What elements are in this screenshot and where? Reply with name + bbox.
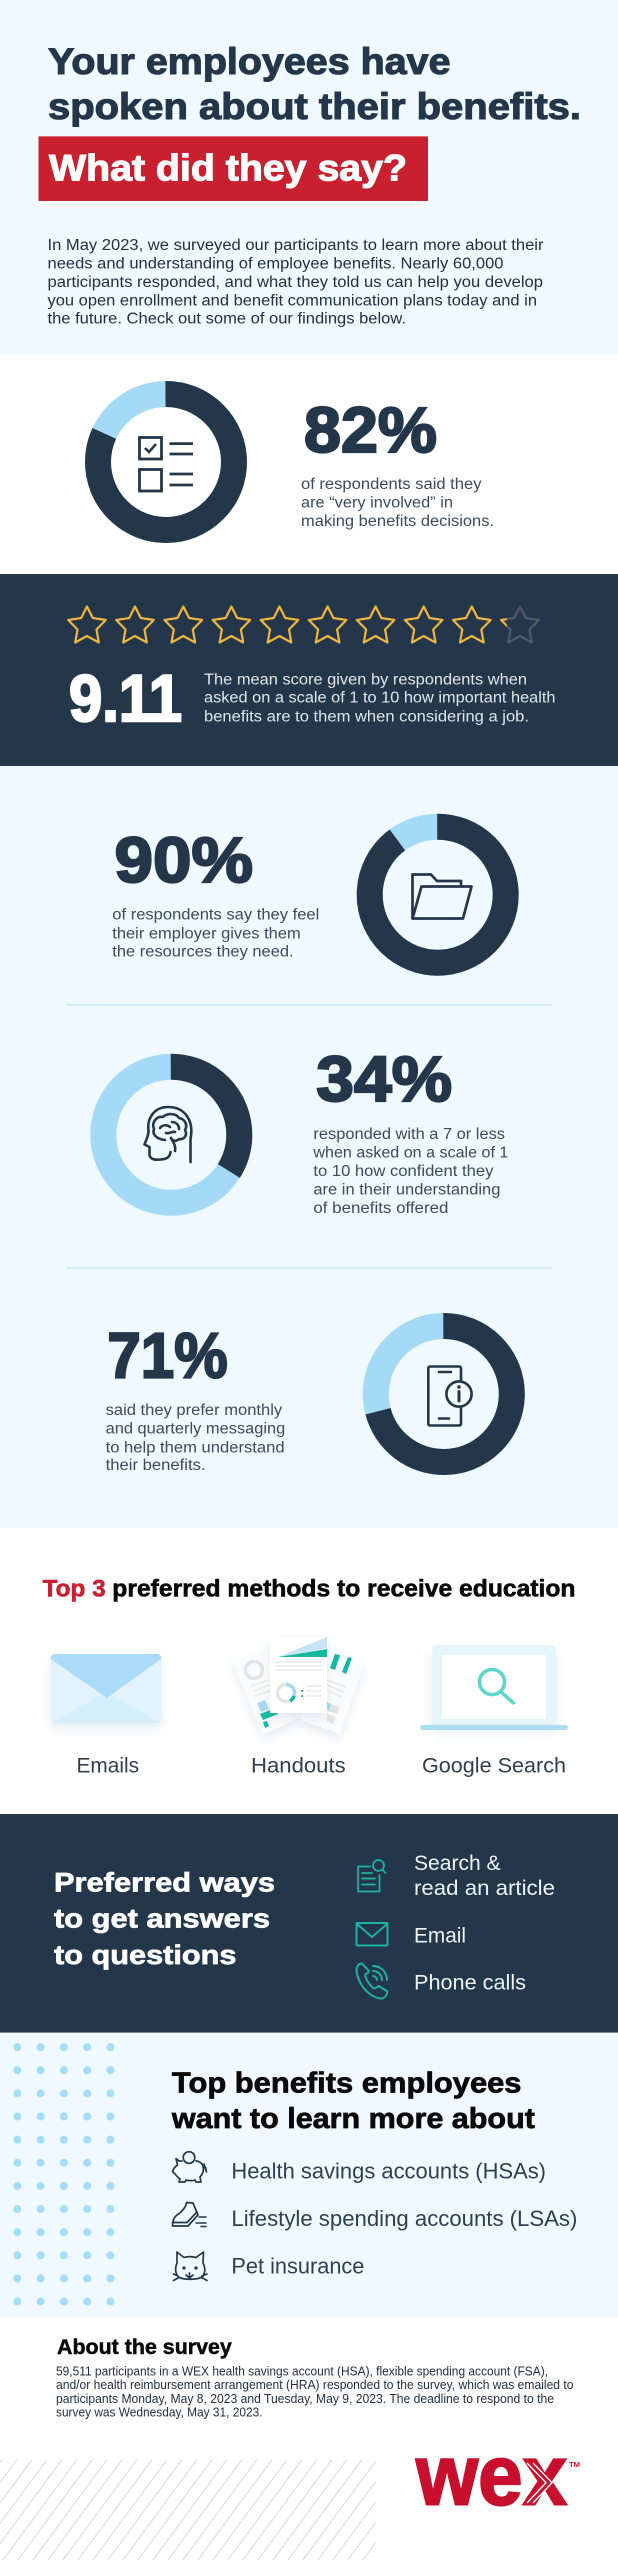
survey text: and/or health reimbursement arrangement (HRA) responded to the survey, which was emailed to [56, 2378, 574, 2392]
stat: 82%: 82% [304, 394, 437, 466]
stat description: 71%: and quarterly messaging [106, 1421, 285, 1438]
icon: article search [358, 1860, 386, 1892]
list labels: Health savings accounts (HSAs) [231, 2158, 546, 2183]
stat: 34%: 34% [316, 1043, 452, 1115]
stat description: 90%: the resources they need. [112, 944, 294, 961]
icon: piggy bank [172, 2152, 206, 2182]
intro paragraph [48, 237, 544, 328]
panel: understanding stats [0, 766, 618, 1528]
icon: running shoe [172, 2202, 206, 2226]
stat description: 90% [112, 906, 319, 961]
labels: Google Search [422, 1755, 566, 1778]
stat: 9.11: 9.11 [69, 661, 182, 735]
donut chart: 90% [370, 827, 506, 963]
survey text: participants Monday, May 8, 2023 and Tuesday, May 9, 2023. The deadline to respond to the [56, 2392, 554, 2406]
panel: about the survey [0, 2317, 618, 2560]
list labels [414, 1852, 555, 1994]
stat description: 34%: are in their understanding [313, 1182, 500, 1199]
icon: phone call [356, 1964, 387, 1999]
stat description: are “very involved” in [301, 495, 453, 512]
stat description: 34%: responded with a 7 or less [313, 1126, 505, 1143]
star rating [68, 606, 539, 642]
heading [54, 1868, 275, 1970]
stat description: benefits are to them when considering a job. [204, 709, 529, 726]
survey text: survey was Wednesday, May 31, 2023. [56, 2405, 262, 2419]
stat description: 34%: when asked on a scale of 1 [312, 1145, 508, 1162]
stat description: 71%: said they prefer monthly [106, 1402, 282, 1419]
panel: preferred ways to get answers [0, 1814, 618, 2033]
icon: email [356, 1923, 388, 1946]
icon: email envelope [50, 1654, 161, 1723]
stat description: 34%: to 10 how confident they [313, 1163, 494, 1180]
heading: About the survey [57, 2336, 232, 2359]
heading: preferred methods to receive education [112, 1576, 576, 1603]
stat description: 71%: to help them understand [106, 1439, 285, 1456]
stat description: making benefits decisions. [301, 513, 494, 530]
title: spoken about their benefits. [48, 86, 581, 127]
donut chart: 82% [98, 394, 234, 530]
list labels: Search & [414, 1852, 501, 1875]
list labels: Phone calls [414, 1971, 526, 1994]
stat description: 90%: their employer gives them [112, 925, 301, 942]
icon: checklist [140, 438, 193, 491]
stat description: of respondents said they [301, 476, 482, 493]
heading: Preferred ways [54, 1868, 275, 1898]
labels: Handouts [251, 1755, 346, 1778]
icon: laptop with search [420, 1645, 568, 1730]
stat description [301, 476, 494, 530]
stat: 71%: 71% [107, 1319, 228, 1391]
intro paragraph: participants responded, and what they told us can help you develop [48, 274, 543, 291]
stat description: asked on a scale of 1 to 10 how important health [204, 690, 556, 707]
stat: 90%: 90% [114, 824, 253, 896]
stat description: 71%: their benefits. [106, 1457, 206, 1474]
survey text [56, 2365, 574, 2419]
list labels: Lifestyle spending accounts (LSAs) [231, 2206, 577, 2231]
heading: Top benefits employees [172, 2067, 522, 2099]
title [48, 41, 581, 127]
heading: want to learn more about [171, 2103, 535, 2135]
heading: to get answers [54, 1904, 270, 1934]
logo: WEX: TM [569, 2460, 580, 2469]
subtitle banner: What did they say? [49, 148, 407, 189]
panel: intro header [0, 0, 618, 354]
title: Your employees have [48, 41, 450, 82]
stat description: 34%: of benefits offered [313, 1200, 448, 1217]
stat description: 71% [106, 1402, 285, 1474]
intro paragraph: you open enrollment and benefit communication plans today and in [48, 292, 537, 310]
icon: cat [174, 2252, 207, 2280]
heading [171, 2067, 535, 2135]
heading: to questions [54, 1940, 236, 1970]
icon: head with brain [144, 1107, 191, 1162]
panel: mean score [0, 574, 618, 766]
panel: top benefits [0, 2033, 618, 2317]
donut chart: 34% [103, 1067, 239, 1203]
labels [76, 1755, 566, 1778]
survey text: 59,511 participants in a WEX health savings account (HSA), flexible spending account (FSA), [56, 2365, 548, 2379]
list labels: Email [414, 1925, 466, 1948]
list labels: Pet insurance [231, 2253, 364, 2278]
icon: folder [412, 874, 472, 918]
stat description: 34% [312, 1126, 508, 1217]
stat description: The mean score given by respondents when [204, 671, 527, 688]
panel: top 3 education methods [0, 1528, 618, 1814]
stat description: 90%: of respondents say they feel [112, 906, 319, 923]
list labels [231, 2158, 577, 2278]
intro paragraph: the future. Check out some of our findings below. [48, 311, 406, 328]
icon: handouts [233, 1637, 364, 1735]
icon: phone with info [428, 1366, 472, 1426]
stat description [204, 671, 556, 726]
heading: Top 3 [43, 1576, 106, 1603]
intro paragraph: needs and understanding of employee benefits. Nearly 60,000 [48, 256, 504, 272]
panel: 82 percent stat [0, 354, 618, 574]
list labels: read an article [414, 1877, 555, 1900]
subtitle banner [38, 136, 428, 201]
logo: WEX: wex [415, 2429, 567, 2524]
intro paragraph: In May 2023, we surveyed our participants to learn more about their [48, 237, 544, 254]
labels: Emails [76, 1755, 139, 1778]
donut chart: 71% [376, 1326, 512, 1462]
